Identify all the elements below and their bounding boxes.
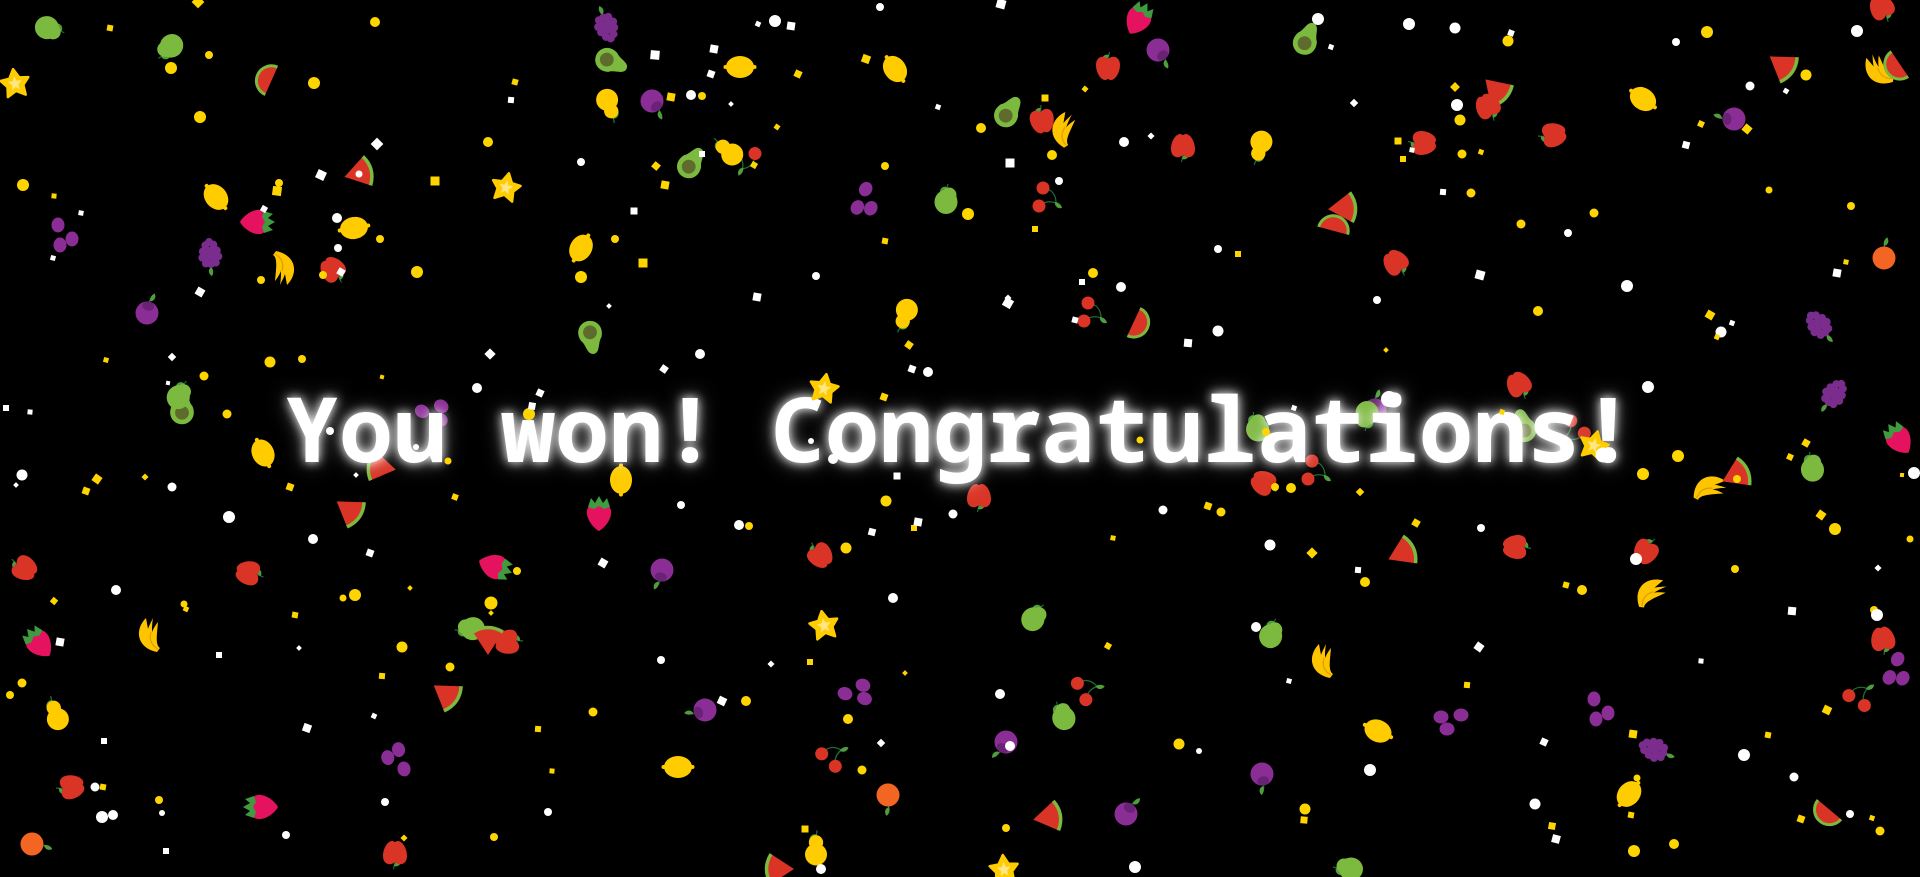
icon: lemon (246, 433, 280, 473)
icon: apple (54, 773, 86, 801)
icon: watermelon slice (1319, 212, 1352, 235)
icon: plum (986, 726, 1022, 766)
icon: apple (1028, 103, 1056, 135)
icon: green apple (33, 14, 67, 42)
icon: avocado (1507, 406, 1539, 445)
icon: berries (52, 218, 78, 252)
icon: apple (1865, 0, 1900, 27)
icon: lemon (336, 214, 372, 242)
icon: watermelon wedge (1761, 44, 1801, 84)
icon: green apple (1045, 697, 1080, 734)
icon: avocado (591, 44, 632, 80)
icon: green apple (453, 615, 487, 643)
icon: lemon (610, 464, 632, 496)
icon: orange (1872, 237, 1896, 270)
icon: apple (801, 536, 838, 573)
icon: plum (1249, 761, 1277, 796)
icon: berries (1878, 649, 1919, 693)
icon: apple (1869, 625, 1897, 657)
icon: banana (1690, 474, 1728, 501)
icon: strawberry (243, 795, 278, 819)
icon: berries (412, 390, 456, 431)
icon: watermelon wedge (425, 673, 465, 713)
icon: apple (315, 252, 352, 289)
icon: cherries (1065, 666, 1108, 709)
icon: cherries (1078, 296, 1107, 328)
icon: plum (1364, 389, 1386, 422)
icon: green apple (934, 184, 958, 214)
icon: lemon (563, 228, 599, 268)
icon: pear (593, 86, 626, 126)
icon: cherries (811, 734, 852, 775)
icon: banana (1312, 644, 1333, 678)
icon: strawberry (475, 549, 516, 584)
icon: lemon (197, 177, 235, 217)
icon: watermelon wedge (1716, 456, 1754, 495)
icon: star fruit (808, 372, 840, 403)
icon: apple (383, 841, 407, 869)
icon: grapes (1812, 374, 1853, 419)
icon: star fruit (1577, 428, 1611, 461)
icon: green apple (163, 376, 195, 412)
icon: green apple (1241, 409, 1273, 445)
icon: star fruit (989, 854, 1019, 877)
icon: berries (379, 741, 412, 780)
icon: watermelon wedge (1327, 192, 1357, 224)
icon: lemon (1358, 714, 1398, 748)
icon: plum (682, 695, 720, 728)
icon: strawberry (1119, 0, 1158, 40)
icon: watermelon slice (1879, 52, 1908, 85)
icon: orange (876, 783, 901, 817)
icon: cherries (729, 142, 765, 177)
icon: lemon (1610, 774, 1648, 814)
icon: watermelon slice (1808, 800, 1841, 831)
icon: strawberry (18, 621, 59, 664)
icon: apple (1096, 52, 1120, 80)
icon: grapes (197, 237, 224, 277)
icon: apple (967, 484, 991, 512)
icon: cherries (1554, 412, 1595, 453)
icon: strawberry (1878, 417, 1918, 460)
icon: cherries (1032, 182, 1062, 212)
icon: pear (707, 131, 748, 170)
icon: berries (1434, 708, 1468, 736)
icon: banana (139, 618, 160, 652)
icon: plum (134, 291, 162, 326)
icon: apple (1502, 368, 1537, 404)
icon: apple (1536, 121, 1568, 149)
icon: watermelon wedge (766, 854, 794, 877)
icon: avocado (672, 142, 711, 183)
icon: green apple (1356, 401, 1378, 431)
icon: lemon (662, 756, 694, 778)
icon: grapes (1799, 305, 1842, 350)
icon: watermelon wedge (366, 450, 398, 484)
icon: green apple (1017, 598, 1052, 635)
icon: pear (888, 296, 921, 336)
icon: watermelon wedge (1382, 534, 1420, 573)
icon: apple (1408, 131, 1436, 155)
icon: avocado (1289, 18, 1325, 59)
icon: star fruit (0, 67, 31, 98)
icon: cherries (1839, 675, 1878, 714)
icon: star fruit (808, 609, 840, 640)
icon: plum (647, 557, 675, 592)
icon: plum (1142, 34, 1180, 73)
title: You won! Congratulations! (285, 367, 1635, 489)
icon: apple (1171, 134, 1195, 162)
icon: green apple (151, 29, 188, 67)
icon: berries (846, 179, 887, 223)
icon: plum (1713, 108, 1746, 130)
icon: strawberry (240, 210, 275, 234)
icon: berries (1588, 692, 1614, 726)
icon: plum (1110, 790, 1146, 830)
icon: avocado (989, 91, 1028, 132)
icon: cherries (1302, 454, 1331, 486)
icon: apple (1378, 245, 1415, 282)
icon: banana (273, 251, 294, 285)
icon: plum (636, 85, 674, 124)
icon: watermelon slice (252, 61, 277, 95)
icon: grapes (1635, 733, 1679, 768)
icon: pear (805, 830, 827, 866)
icon: green apple (1257, 616, 1285, 650)
icon: grapes (588, 2, 623, 46)
icon: apple (1471, 90, 1506, 126)
icon: watermelon wedge (1475, 69, 1515, 109)
icon: green apple (1797, 449, 1827, 484)
icon: lemon (877, 49, 913, 89)
icon: watermelon wedge (473, 628, 503, 655)
icon: banana (1047, 110, 1078, 149)
icon: watermelon wedge (341, 155, 375, 191)
icon: apple (5, 550, 41, 585)
icon: apple (1247, 466, 1283, 501)
icon: lemon (724, 56, 756, 78)
icon: banana (1860, 51, 1896, 91)
icon: watermelon wedge (328, 489, 368, 529)
icon: berries (836, 672, 878, 709)
icon: pear (1245, 128, 1275, 168)
icon: avocado (170, 391, 194, 424)
icon: watermelon slice (1127, 308, 1154, 342)
icon: lemon (1623, 81, 1663, 117)
icon: orange (20, 832, 54, 857)
icon: strawberry (587, 496, 611, 531)
icon: apple (234, 559, 266, 587)
icon: apple (1503, 535, 1531, 559)
icon: apple (1629, 532, 1664, 568)
icon: banana (1630, 574, 1670, 610)
icon: green apple (1333, 858, 1363, 877)
icon: avocado (576, 319, 605, 356)
icon: star fruit (490, 170, 523, 203)
icon: watermelon wedge (1031, 800, 1063, 834)
icon: pear (39, 693, 72, 733)
icon: apple (493, 628, 525, 656)
